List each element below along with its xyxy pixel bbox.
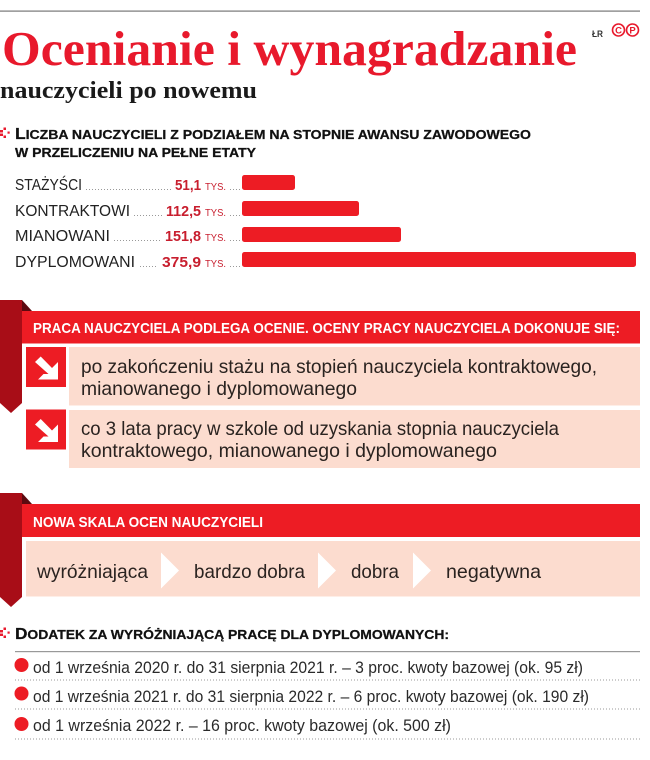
icon: diagonal arrow bbox=[26, 347, 66, 387]
ribbon bbox=[0, 300, 32, 413]
row: stażyści bbox=[15, 175, 295, 194]
section: teachers by promotion grade bbox=[0, 126, 636, 271]
panel: new rating scale bbox=[0, 493, 640, 607]
item: after internship: mianowanego i dyplomowanego bbox=[81, 378, 357, 400]
item: after internship bbox=[26, 347, 640, 406]
icon: diagonal arrow bbox=[26, 410, 66, 450]
row: mianowani: MIANOWANI bbox=[15, 228, 110, 245]
row: stażyści: 51,1 bbox=[175, 177, 201, 194]
icon: red dots marker bbox=[0, 628, 10, 638]
rating scale strip: wyróżniająca bbox=[36, 561, 148, 583]
row: kontraktowi: KONTRAKTOWI bbox=[15, 203, 130, 220]
row: kontraktowi: TYS. bbox=[205, 207, 226, 219]
list item 2: od 1 września 2021 r. do 31 sierpnia 2022 r. – 6 proc. kwoty bazowej (ok. 190 zł) bbox=[33, 688, 589, 706]
section heading: LICZBA NAUCZYCIELI Z PODZIAŁEM NA STOPNIE AWANSU ZAWODOWEGO bbox=[15, 126, 531, 143]
item: every three years: kontraktowego, mianowanego i dyplomowanego bbox=[81, 440, 497, 462]
rating scale strip bbox=[26, 541, 640, 596]
icon: red dots marker bbox=[0, 128, 10, 138]
section heading bbox=[15, 126, 531, 160]
arrow bbox=[413, 552, 431, 588]
row: dyplomowani bbox=[15, 252, 636, 271]
list item 3 bbox=[14, 717, 640, 739]
bar chart bbox=[15, 175, 636, 271]
rating scale strip: bardzo dobra bbox=[194, 561, 305, 583]
row: dyplomowani: TYS. bbox=[205, 258, 226, 270]
row: mianowani: 151,8 bbox=[165, 228, 201, 245]
row: kontraktowi bbox=[15, 201, 359, 220]
list item 3: od 1 września 2022 r. – 16 proc. kwoty bazowej (ok. 500 zł) bbox=[33, 717, 451, 735]
panel header bbox=[22, 504, 640, 537]
list item 1: od 1 września 2020 r. do 31 sierpnia 2021 r. – 3 proc. kwoty bazowej (ok. 95 zł) bbox=[33, 659, 583, 677]
row: mianowani bbox=[15, 227, 401, 245]
arrow bbox=[318, 552, 336, 588]
ribbon bbox=[0, 493, 32, 607]
section: allowance for outstanding work bbox=[0, 626, 640, 739]
author credit and copyright mark: C bbox=[615, 25, 622, 36]
row: kontraktowi: 112,5 bbox=[166, 203, 201, 220]
panel header: NOWA SKALA OCEN NAUCZYCIELI bbox=[33, 514, 263, 531]
row: stażyści: TYS. bbox=[205, 181, 226, 193]
section heading: DODATEK ZA WYRÓŻNIAJĄCĄ PRACĘ DLA DYPLOMOWANYCH: bbox=[15, 626, 449, 643]
subtitle: nauczycieli po nowemu bbox=[0, 77, 257, 104]
panel: teacher evaluation bbox=[0, 300, 640, 468]
author credit and copyright mark: P bbox=[629, 25, 636, 36]
row: mianowani: TYS. bbox=[205, 232, 226, 244]
author credit and copyright mark bbox=[592, 24, 638, 39]
item: every three years: co 3 lata pracy w szkole od uzyskania stopnia nauczyciela bbox=[81, 418, 559, 440]
item: after internship: po zakończeniu stażu na stopień nauczyciela kontraktowego, bbox=[81, 356, 597, 378]
section heading: W PRZELICZENIU NA PEŁNE ETATY bbox=[15, 146, 257, 160]
row: stażyści: STAŻYŚCI bbox=[15, 176, 82, 194]
rating scale strip: negatywna bbox=[446, 561, 541, 583]
author credit and copyright mark: ŁR bbox=[592, 29, 603, 39]
item: every three years bbox=[26, 410, 640, 468]
row: dyplomowani: 375,9 bbox=[162, 254, 201, 271]
arrow bbox=[161, 552, 179, 588]
title: Ocenianie i wynagradzanie bbox=[2, 21, 577, 76]
row: dyplomowani: DYPLOMOWANI bbox=[15, 254, 135, 271]
panel header bbox=[22, 311, 640, 344]
rating scale strip: dobra bbox=[351, 561, 399, 583]
